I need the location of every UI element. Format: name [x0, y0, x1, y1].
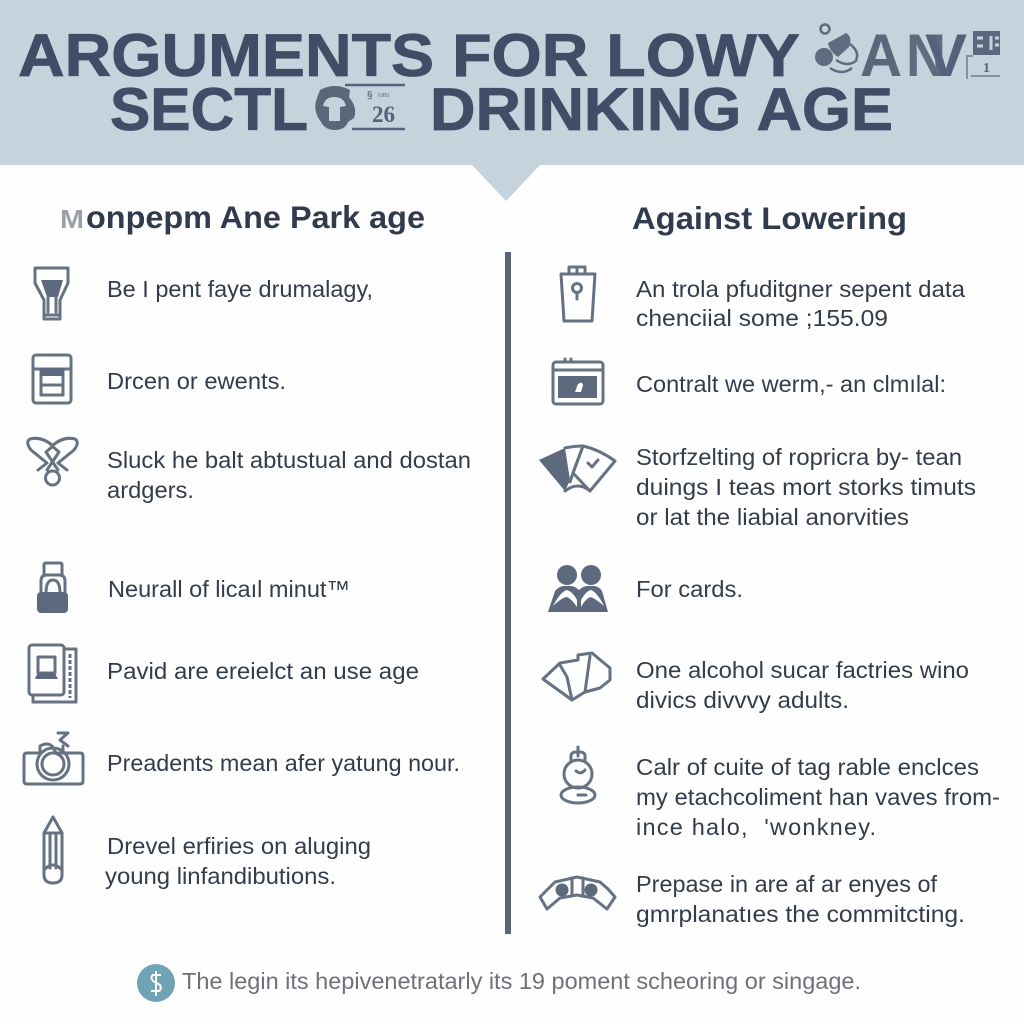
argument text: Calr of cuite of tag rable enclces — [636, 754, 979, 780]
title: SECTL — [110, 76, 308, 143]
title: N — [906, 22, 946, 89]
title badge number: 26 — [372, 102, 395, 127]
argument text: Drevel erfiries on aluging — [107, 833, 371, 859]
icon: camera — [24, 733, 83, 784]
icon: lock bottle — [37, 563, 68, 613]
icon: two people — [548, 565, 608, 612]
argument text: duings I teas mort storks timuts — [636, 474, 976, 500]
icon: fanned cards — [539, 446, 615, 491]
footer note — [137, 964, 861, 1002]
argument text: One alcohol sucar factries wino — [636, 657, 969, 683]
icon: title clock badge — [315, 85, 405, 130]
left column heading: M — [60, 204, 84, 234]
argument text: young linfandibutions. — [105, 863, 336, 889]
title: ARGUMENTS FOR LOWY — [18, 22, 800, 89]
title: A — [860, 22, 902, 89]
argument text: Contralt we werm,- an clmılal: — [636, 371, 946, 397]
argument text: An trola pfuditgner sepent data — [636, 276, 966, 302]
argument text: Drcen or ewents. — [107, 368, 286, 394]
argument text: ardgers. — [107, 477, 194, 503]
title badge number: § — [367, 90, 373, 101]
panel: for lowering — [24, 199, 471, 889]
icon: pencil — [44, 817, 62, 883]
argument text: Storfzelting of ropricra by- tean — [636, 444, 962, 470]
argument text: Be I pent faye drumalagy, — [107, 276, 373, 302]
center divider — [505, 252, 511, 934]
argument text: For cards. — [636, 576, 743, 602]
argument text: Sluck he balt abtustual and dostan — [107, 447, 471, 473]
title — [18, 22, 967, 143]
argument text: Pavid are ereielct an use age — [107, 658, 419, 684]
icon: book — [29, 645, 76, 702]
icon: figure on base — [561, 747, 595, 803]
argument text: Prepase in are af ar enyes of — [636, 871, 937, 897]
icon: calendar — [553, 359, 603, 404]
argument text: Preadents mean afer yatung nour. — [107, 750, 460, 776]
argument text: divics divvvy adults. — [636, 687, 849, 713]
icon: footer badge — [137, 964, 175, 1002]
icon: title decoration figure — [815, 24, 857, 72]
argument text — [636, 871, 965, 927]
argument text: Neurall of licaıl minut™ — [108, 576, 350, 602]
argument text — [636, 444, 976, 530]
argument text: chenciial some ;155.09 — [636, 305, 888, 331]
icon: goblet — [35, 268, 68, 319]
argument text: gmrplanatıes the commitcting. — [636, 901, 965, 927]
footer text: The legin its hepivenetratarly its 19 poment scheoring or singage. — [182, 968, 861, 994]
icon: title calendar — [967, 31, 1000, 79]
argument text: my etachcoliment han vaves from- — [636, 784, 1000, 810]
argument text — [105, 833, 371, 889]
title badge number: lotto — [378, 93, 390, 99]
argument text — [636, 657, 969, 713]
argument text — [636, 754, 1000, 840]
icon: cup — [561, 267, 595, 321]
right column heading: Against Lowering — [632, 200, 907, 236]
argument text — [107, 447, 471, 503]
icon: folded note — [543, 653, 610, 700]
argument text: ince halo, 'wonkney. — [636, 814, 876, 840]
icon: banknote arc — [540, 877, 615, 909]
left column heading: onpepm Ane Park age — [86, 199, 425, 235]
icon: box — [33, 355, 71, 403]
icon: winged knot — [28, 438, 77, 485]
title: V — [925, 22, 967, 89]
title: DRINKING AGE — [430, 76, 893, 143]
panel: against lowering — [539, 200, 1000, 927]
header banner — [0, 0, 1024, 201]
argument text — [636, 276, 966, 331]
title badge number — [367, 90, 395, 127]
icon: title calendar: 1 — [983, 61, 990, 76]
argument text: or lat the liabial anorvities — [636, 504, 909, 530]
